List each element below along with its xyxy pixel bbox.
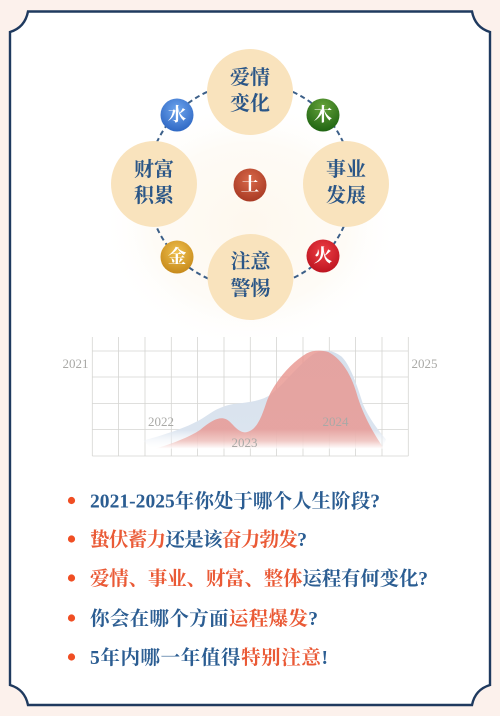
- topic: career: 发展: [326, 184, 366, 207]
- topic: love: [207, 49, 293, 135]
- question 3: 爱情、事业、财富、整体运程有何变化?: [89, 567, 428, 590]
- year labels: [62, 356, 438, 450]
- icon: wood: 木: [314, 105, 332, 126]
- year labels: 2021: [62, 356, 88, 371]
- question 1: 2021-2025年你处于哪个人生阶段?: [90, 490, 380, 512]
- topic: career: [303, 141, 389, 227]
- icon: water: 水: [168, 105, 187, 126]
- topic: caution: [208, 234, 294, 320]
- icon: earth: 土: [241, 175, 259, 196]
- year labels: 2022: [148, 414, 174, 429]
- topic: love: 爱情: [229, 66, 270, 89]
- topic: wealth: [111, 141, 197, 227]
- icon: fire: 火: [314, 246, 333, 267]
- topic: caution: 警惕: [230, 277, 270, 300]
- question 4: 你会在哪个方面运程爆发?: [90, 608, 318, 630]
- topic: wealth: 财富: [134, 157, 174, 181]
- question list: [68, 490, 428, 669]
- year labels: 2024: [322, 414, 349, 429]
- diagram: five elements cycle: [111, 49, 389, 320]
- background glow: [100, 100, 400, 350]
- icon: wood: [306, 98, 340, 132]
- topic: wealth: 积累: [134, 184, 174, 207]
- icon: fire: [306, 240, 340, 272]
- question 5: 5年内哪一年值得特别注意!: [90, 646, 328, 669]
- year labels: 2025: [412, 356, 438, 371]
- blue curve: [143, 351, 386, 447]
- pink curve: [150, 351, 383, 450]
- topic: caution: 注意: [230, 249, 272, 273]
- icon: metal: [160, 240, 194, 274]
- icon: metal: 金: [168, 247, 187, 268]
- year labels: 2023: [232, 435, 258, 450]
- topic: love: 变化: [230, 91, 270, 115]
- topic: career: 事业: [326, 158, 366, 181]
- question 2: 蛰伏蓄力还是该奋力勃发?: [90, 528, 307, 551]
- icon: earth: [234, 168, 266, 202]
- area chart 2021-2025: [62, 337, 438, 456]
- icon: water: [160, 98, 194, 132]
